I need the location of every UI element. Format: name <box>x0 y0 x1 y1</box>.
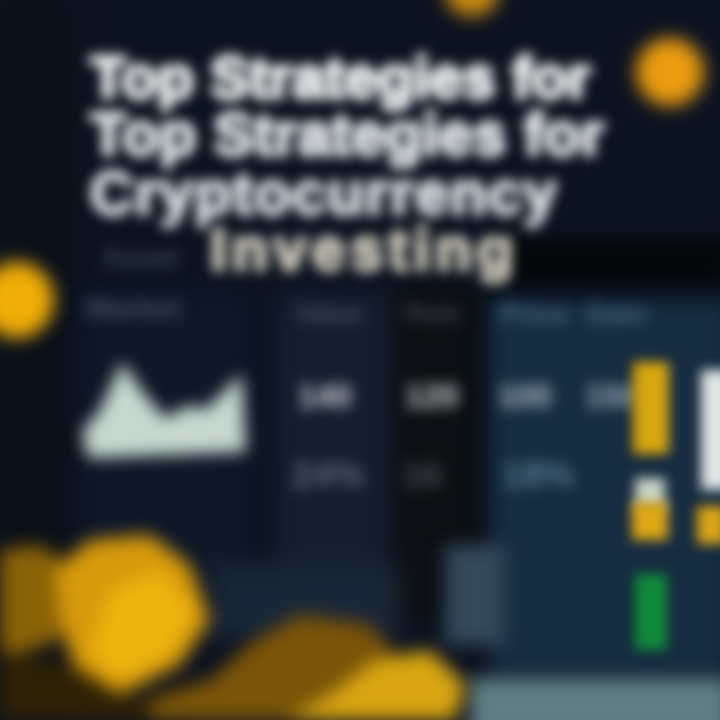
strip: bottom right light band <box>470 678 720 720</box>
table values <box>289 375 638 495</box>
table values: 120 <box>405 378 458 414</box>
table values: 18% <box>502 454 574 495</box>
title: Investing <box>210 216 518 283</box>
table header labels: Value <box>295 298 363 328</box>
dark band behind last title line <box>500 240 720 282</box>
table header labels: Rate <box>405 298 461 328</box>
title: Cryptocurrency <box>90 160 558 227</box>
bars: gold and green <box>622 352 720 658</box>
title: Top Strategies for <box>90 101 604 168</box>
table values: 100 <box>498 378 551 414</box>
table values: 140 <box>298 378 351 414</box>
table values: 150 <box>585 378 638 414</box>
table header labels <box>82 242 649 329</box>
icon: gold coin top <box>446 0 498 16</box>
title <box>80 44 614 294</box>
table header labels: Gain <box>585 298 647 329</box>
panel: right blue table <box>490 300 720 680</box>
table values: 16 <box>402 454 442 495</box>
table header labels: Market <box>85 292 182 325</box>
title: Top Strategies for <box>90 45 590 111</box>
icon: gold coin right <box>636 38 704 106</box>
table header labels: Price <box>500 298 568 329</box>
lower table cell <box>445 545 505 645</box>
table values: 24% <box>292 454 364 495</box>
table header labels: Asset <box>102 242 178 273</box>
icon: gold coin left <box>0 262 54 338</box>
